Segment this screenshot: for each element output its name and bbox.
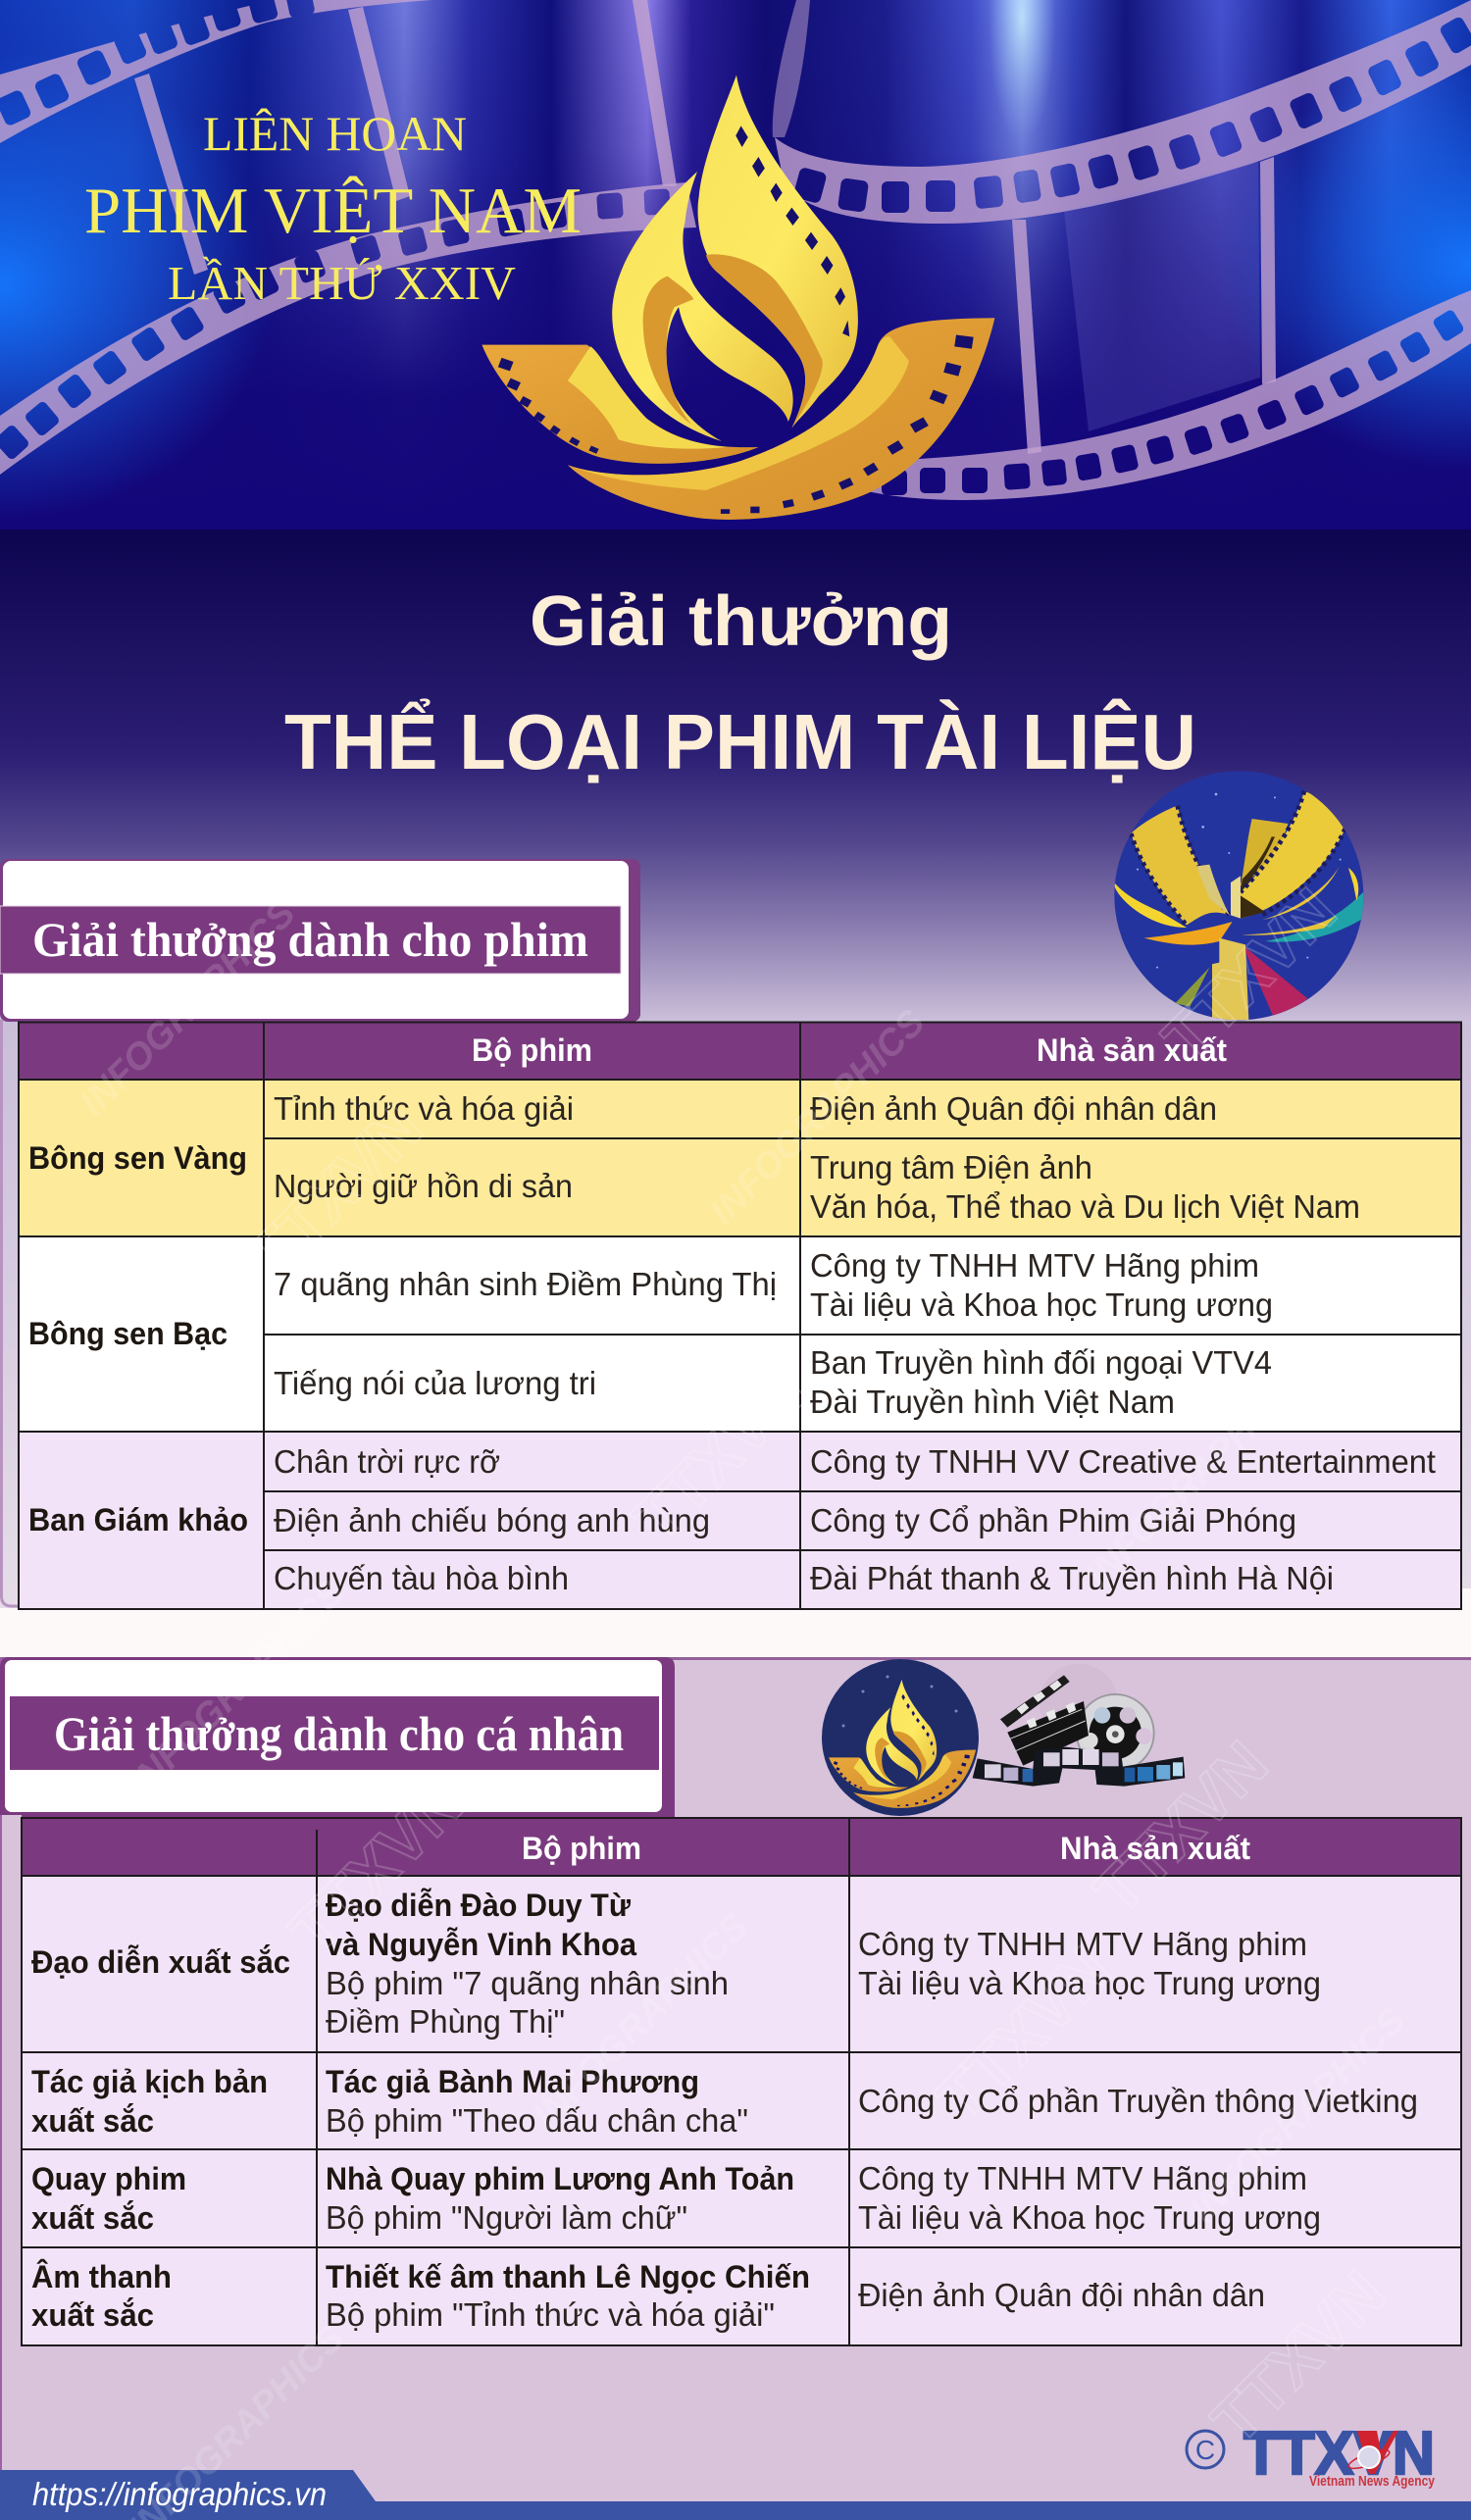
- title: Giải thưởng: [530, 582, 952, 661]
- group: Ban Giám khảo: Công ty TNHH VV Creative & Entertainment: [810, 1443, 1436, 1480]
- row: Âm thanh xuất sắc: Âm thanh: [31, 2259, 172, 2294]
- title: THỂ LOẠI PHIM TÀI LIỆU: [284, 698, 1196, 785]
- watermark: agency marks: TTXVN: [1080, 1727, 1281, 1928]
- row: Đạo diễn xuất sắc: Điềm Phùng Thị": [326, 2003, 565, 2040]
- row: Đạo diễn xuất sắc: Đạo diễn xuất sắc: [31, 1944, 290, 1980]
- group: Ban Giám khảo: [19, 1432, 1461, 1609]
- row: Tác giả kịch bản xuất sắc: [31, 2064, 1418, 2139]
- watermark: agency marks: INFOGRAPHICS: [526, 1906, 756, 2137]
- row: Âm thanh xuất sắc: Bộ phim "Tỉnh thức và hóa giải": [326, 2296, 775, 2333]
- group: Ban Giám khảo: Công ty Cổ phần Phim Giải Phóng: [810, 1502, 1296, 1538]
- row: Đạo diễn xuất sắc: Công ty TNHH MTV Hãng phim: [858, 1926, 1307, 1962]
- watermark: agency marks: INFOGRAPHICS: [122, 1573, 352, 1803]
- icon: clapperboard, reel and film strip: [973, 1664, 1185, 1787]
- group: Bông sen Vàng: [19, 1080, 1461, 1236]
- icon: festival trophy circle: [1114, 771, 1363, 1020]
- icon: festival logo badge: [822, 1659, 979, 1816]
- festival name heading: [84, 106, 582, 310]
- watermark: agency marks: [73, 874, 1413, 2520]
- logo: TTXVN Vietnam News Agency: Vietnam News Agency: [1309, 2473, 1436, 2490]
- table header row: [19, 1022, 1461, 1080]
- row: Âm thanh xuất sắc: [31, 2259, 1265, 2333]
- row: Quay phim xuất sắc: Nhà Quay phim Lương Anh Toản: [326, 2161, 794, 2196]
- group: Bông sen Vàng: Người giữ hồn di sản: [274, 1168, 573, 1204]
- watermark: agency marks: TTXVN: [276, 1766, 477, 1967]
- panel: individual awards heading: [0, 1657, 675, 1820]
- group: Ban Giám khảo: Ban Giám khảo: [28, 1502, 248, 1537]
- panel: film awards background: [0, 1020, 1471, 1609]
- group: Bông sen Bạc: Công ty TNHH MTV Hãng phim: [810, 1247, 1259, 1284]
- footer bar with website link: [0, 2470, 1471, 2520]
- row: Quay phim xuất sắc: [31, 2160, 1321, 2236]
- festival name heading: LẦN THỨ XXIV: [168, 256, 516, 310]
- row: Quay phim xuất sắc: xuất sắc: [31, 2200, 154, 2236]
- table header row: Nhà sản xuất: [1037, 1033, 1227, 1068]
- watermark: agency marks: TTXVN: [1197, 2256, 1398, 2457]
- watermark: agency marks: INFOGRAPHICS: [1183, 2000, 1413, 2231]
- panel: individual awards heading: Giải thưởng dành cho cá nhân: [54, 1706, 624, 1761]
- panel: individual awards background: [0, 1657, 1471, 2520]
- row: Âm thanh xuất sắc: xuất sắc: [31, 2297, 154, 2333]
- row: Tác giả kịch bản xuất sắc: Bộ phim "Theo dấu chân cha": [326, 2102, 748, 2139]
- group: Bông sen Bạc: Tài liệu và Khoa học Trung ương: [810, 1286, 1273, 1323]
- logo: TTXVN Vietnam News Agency: C: [1195, 2435, 1215, 2465]
- group: Bông sen Bạc: Tiếng nói của lương tri: [274, 1365, 596, 1401]
- group: Bông sen Vàng: Tỉnh thức và hóa giải: [274, 1090, 574, 1127]
- watermark: agency marks: INFOGRAPHICS: [1078, 1365, 1308, 1595]
- header banner: stage curtain with film reels: [0, 0, 1471, 529]
- row: Tác giả kịch bản xuất sắc: xuất sắc: [31, 2103, 154, 2139]
- group: Bông sen Vàng: Trung tâm Điện ảnh: [810, 1149, 1092, 1185]
- watermark: agency marks: TTXVN: [234, 1090, 435, 1291]
- row: Đạo diễn xuất sắc: Bộ phim "7 quãng nhân sinh: [326, 1965, 729, 2001]
- group: Bông sen Vàng: Văn hóa, Thể thao và Du lịch Việt Nam: [810, 1188, 1360, 1225]
- row: Quay phim xuất sắc: Bộ phim "Người làm chữ": [326, 2199, 687, 2236]
- film strips: [0, 0, 1471, 500]
- row: Quay phim xuất sắc: Quay phim: [31, 2161, 186, 2196]
- group: Bông sen Bạc: Bông sen Bạc: [28, 1316, 228, 1351]
- group: Bông sen Bạc: [19, 1236, 1461, 1432]
- page background gradient: [0, 529, 1471, 1667]
- title: [284, 582, 1196, 785]
- group: Ban Giám khảo: Đài Phát thanh & Truyền hình Hà Nội: [810, 1560, 1334, 1596]
- festival name heading: PHIM VIỆT NAM: [84, 175, 582, 247]
- table header row: [22, 1818, 1461, 1876]
- watermark: agency marks: INFOGRAPHICS: [702, 1002, 933, 1233]
- panel: film awards heading: [0, 859, 640, 1022]
- row: Tác giả kịch bản xuất sắc: Tác giả Bành Mai Phương: [326, 2064, 699, 2099]
- row: Tác giả kịch bản xuất sắc: Tác giả kịch bản: [31, 2064, 268, 2099]
- watermark: agency marks: TTXVN: [923, 1933, 1124, 2134]
- table: individual awards: [22, 1818, 1461, 2345]
- table header row: Bộ phim: [472, 1033, 592, 1068]
- row: Tác giả kịch bản xuất sắc: Công ty Cổ phần Truyền thông Vietking: [858, 2083, 1418, 2119]
- group: Ban Giám khảo: Chân trời rực rỡ: [274, 1443, 500, 1480]
- festival name heading: LIÊN HOAN: [203, 106, 467, 161]
- group: Bông sen Bạc: Đài Truyền hình Việt Nam: [810, 1384, 1175, 1420]
- row: Đạo diễn xuất sắc: Đạo diễn Đào Duy Từ: [326, 1888, 632, 1923]
- logo: TTXVN Vietnam News Agency: TTXVN: [1243, 2420, 1435, 2488]
- row: Đạo diễn xuất sắc: Tài liệu và Khoa học Trung ương: [858, 1965, 1321, 2001]
- watermark: agency marks: TTXVN: [1148, 874, 1349, 1075]
- group: Bông sen Vàng: Điện ảnh Quân đội nhân dân: [810, 1090, 1217, 1127]
- watermark: agency marks: INFOGRAPHICS: [73, 893, 303, 1124]
- table header row: Bộ phim: [522, 1831, 641, 1866]
- watermark: agency marks: TTXVN: [619, 1354, 820, 1555]
- icon: golden lotus film logo: [482, 76, 994, 520]
- row: Đạo diễn xuất sắc: [31, 1888, 1321, 2040]
- row: Âm thanh xuất sắc: Thiết kế âm thanh Lê Ngọc Chiến: [326, 2259, 810, 2294]
- panel: film awards heading: Giải thưởng dành cho phim: [32, 912, 588, 967]
- group: Bông sen Bạc: Ban Truyền hình đối ngoại VTV4: [810, 1344, 1272, 1381]
- table header row: Nhà sản xuất: [1060, 1831, 1250, 1866]
- group: Bông sen Bạc: 7 quãng nhân sinh Điềm Phùng Thị: [274, 1266, 777, 1302]
- row: Đạo diễn xuất sắc: và Nguyễn Vinh Khoa: [326, 1927, 636, 1962]
- table: film awards: [19, 1022, 1461, 1609]
- group: Bông sen Vàng: Bông sen Vàng: [28, 1140, 247, 1176]
- footer bar with website link: https://infographics.vn: [32, 2476, 327, 2512]
- group: Ban Giám khảo: Chuyến tàu hòa bình: [274, 1560, 569, 1596]
- row: Quay phim xuất sắc: Công ty TNHH MTV Hãng phim: [858, 2160, 1307, 2196]
- row: Quay phim xuất sắc: Tài liệu và Khoa học Trung ương: [858, 2199, 1321, 2236]
- row: Âm thanh xuất sắc: Điện ảnh Quân đội nhân dân: [858, 2277, 1265, 2313]
- group: Ban Giám khảo: Điện ảnh chiếu bóng anh hùng: [274, 1502, 710, 1538]
